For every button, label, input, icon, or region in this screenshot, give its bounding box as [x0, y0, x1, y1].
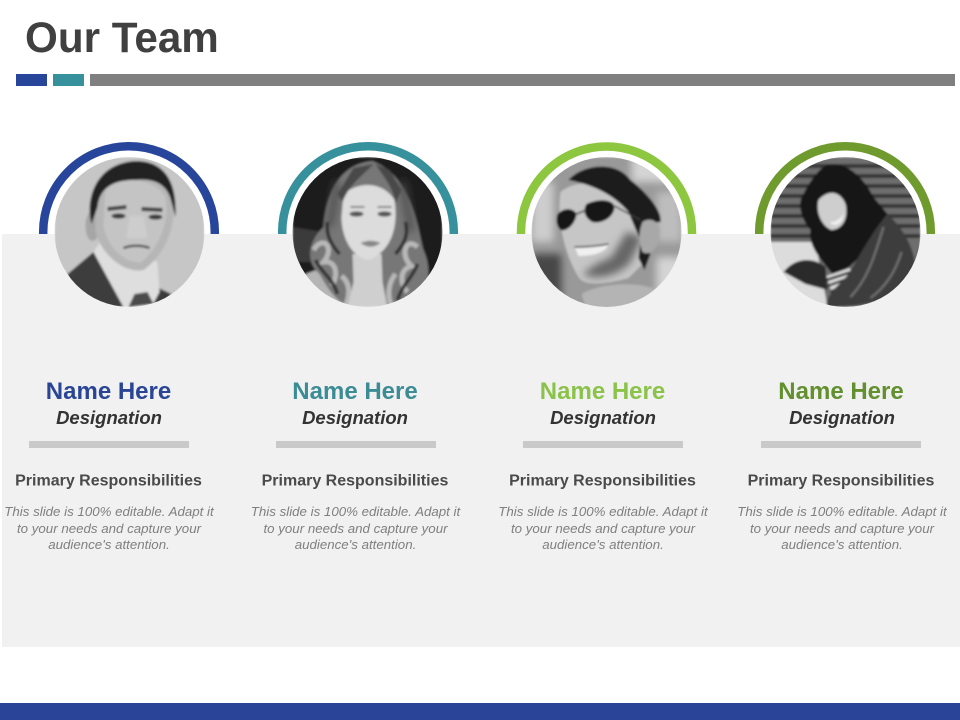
column: person 2: audience's attention.	[295, 537, 416, 552]
arc: teal	[282, 146, 454, 234]
column: person 4: to your needs and capture your	[750, 521, 935, 536]
column: person 4: Primary Responsibilities	[748, 472, 934, 490]
column: person 3: to your needs and capture your	[511, 521, 696, 536]
column: person 1: Name Here	[46, 378, 171, 405]
column: person 3: Primary Responsibilities	[509, 472, 696, 490]
column: person 3	[498, 378, 709, 552]
arc: dark green	[759, 146, 931, 234]
column: person 1: This slide is 100% editable. Adapt it	[4, 504, 215, 519]
column: person 3: Name Here	[540, 378, 665, 405]
column: person 2: Designation	[302, 407, 408, 428]
header accent bars	[16, 74, 955, 86]
column: person 2: Name Here	[292, 378, 418, 405]
background panel	[2, 234, 960, 647]
column: person 3: Designation	[550, 407, 656, 428]
arc: light green	[521, 147, 692, 234]
column: person 2: to your needs and capture your	[263, 521, 448, 536]
footer bar	[0, 703, 960, 720]
photo: woman with curls	[292, 157, 442, 307]
column: person 4: audience's attention.	[781, 537, 903, 552]
title: Our Team	[25, 14, 219, 61]
column: person 2	[251, 378, 462, 552]
column: person 4: Designation	[789, 407, 895, 428]
column: person 4: Name Here	[778, 378, 904, 405]
column: person 3: This slide is 100% editable. Adapt it	[498, 504, 709, 519]
photo: man in suit	[54, 157, 204, 310]
column: person 1	[4, 378, 215, 552]
column: person 4: This slide is 100% editable. Adapt it	[737, 504, 948, 519]
column: person 3: audience's attention.	[542, 537, 664, 552]
column: person 1: Designation	[56, 407, 162, 428]
photo: laughing man with sunglasses	[532, 157, 682, 314]
arc: blue	[43, 146, 215, 234]
photo: smiling woman in leather jacket	[770, 157, 920, 307]
column: person 2: This slide is 100% editable. Adapt it	[251, 504, 462, 519]
column: person 4	[737, 378, 948, 552]
column: person 2: Primary Responsibilities	[262, 472, 448, 490]
column: person 1: Primary Responsibilities	[15, 472, 202, 490]
column: person 1: audience's attention.	[48, 537, 170, 552]
column: person 1: to your needs and capture your	[17, 521, 202, 536]
